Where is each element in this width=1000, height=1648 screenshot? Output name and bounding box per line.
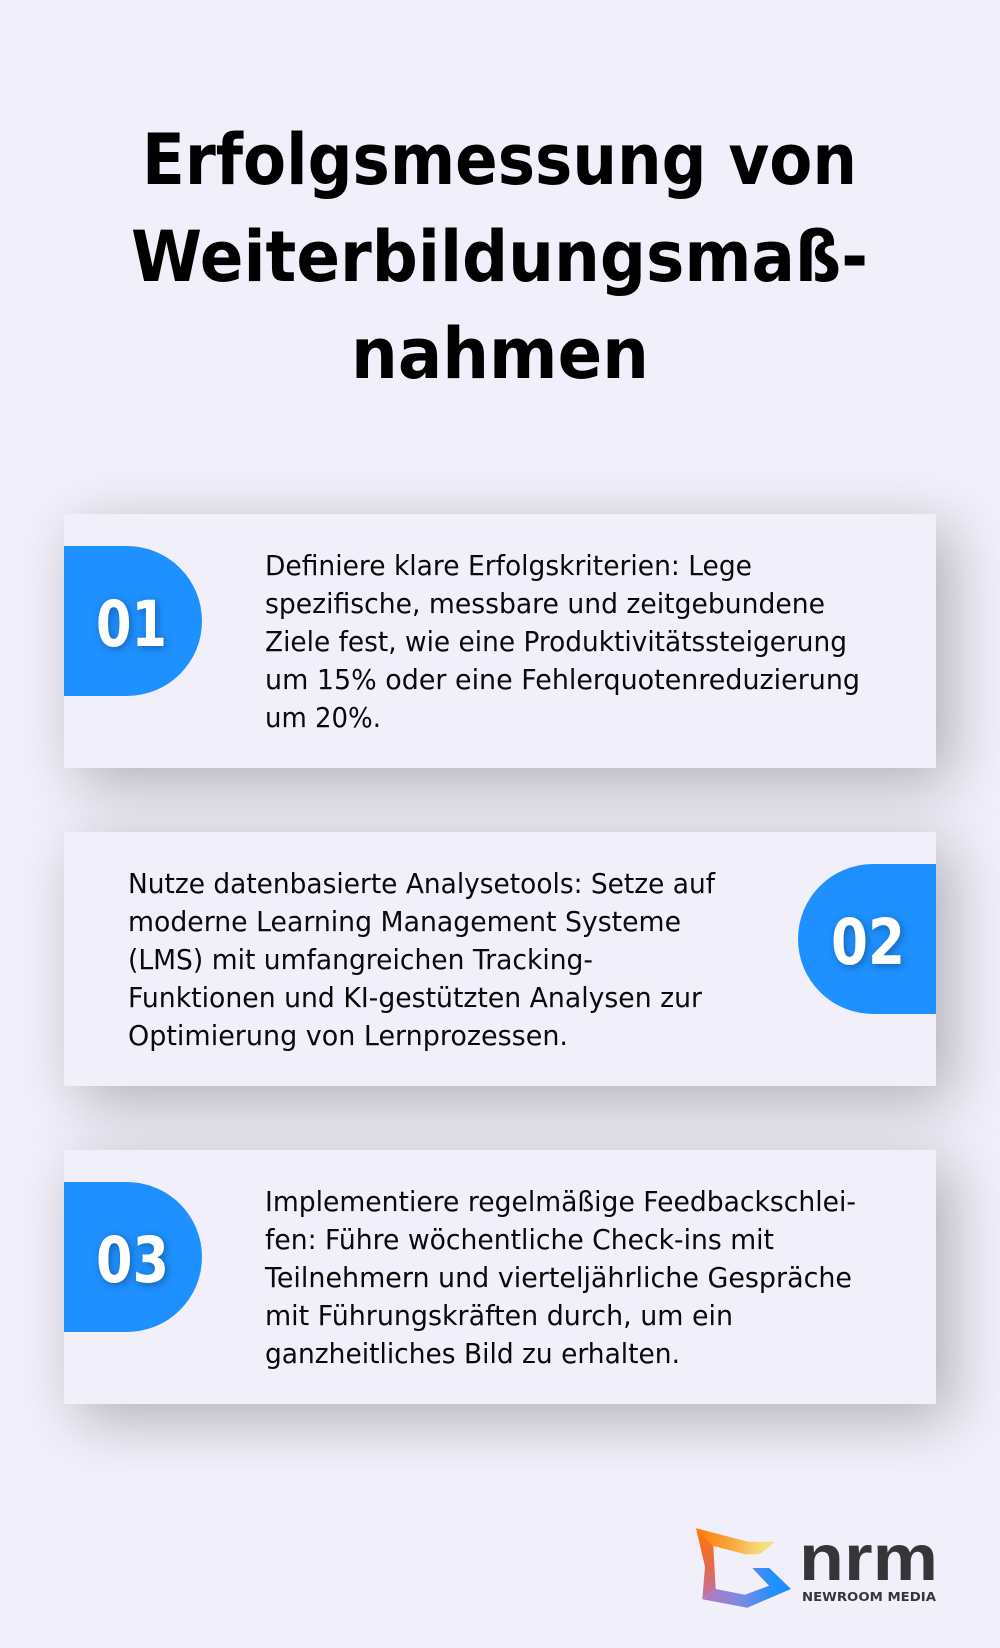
text block 02: Funktionen und KI-gestützten Analysen zur bbox=[128, 982, 703, 1014]
text block 01 bbox=[265, 550, 860, 734]
text block 03 bbox=[264, 1186, 856, 1370]
text block 01: um 15% oder eine Fehlerquotenreduzierung bbox=[265, 664, 860, 696]
logo tagline: NEWROOM MEDIA bbox=[802, 1589, 936, 1604]
card background 02 bbox=[64, 832, 936, 1086]
text block 03: fen: Führe wöchentliche Check-ins mit bbox=[265, 1224, 774, 1256]
text block 02 bbox=[128, 868, 716, 1052]
logo wordmark: nrm bbox=[799, 1521, 938, 1594]
panel: step 02 bbox=[64, 832, 936, 1086]
text block 03: ganzheitliches Bild zu erhalten. bbox=[265, 1338, 680, 1370]
text block 03: Teilnehmern und vierteljährliche Gespräche bbox=[264, 1262, 852, 1294]
logo: Newroom Media bbox=[696, 1521, 938, 1608]
card background 03 bbox=[64, 1150, 936, 1404]
title bbox=[131, 119, 868, 395]
text block 01: spezifische, messbare und zeitgebundene bbox=[265, 588, 825, 620]
text block 02: Nutze datenbasierte Analysetools: Setze auf bbox=[128, 868, 716, 900]
text block 02: (LMS) mit umfangreichen Tracking- bbox=[128, 944, 593, 976]
text block 01: Ziele fest, wie eine Produktivitätssteigerung bbox=[265, 626, 847, 658]
text block 02: Optimierung von Lernprozessen. bbox=[128, 1020, 568, 1052]
text block 02: moderne Learning Management Systeme bbox=[128, 906, 681, 938]
number badge 03 bbox=[64, 1182, 202, 1332]
text block 03: Implementiere regelmäßige Feedbackschlei- bbox=[265, 1186, 856, 1218]
card background 01 bbox=[64, 514, 936, 768]
number badge 01 bbox=[64, 546, 202, 696]
text block 01: um 20%. bbox=[265, 702, 381, 734]
text block 01: Definiere klare Erfolgskriterien: Lege bbox=[265, 550, 752, 582]
title: nahmen bbox=[351, 313, 649, 395]
title: Weiterbildungsmaß- bbox=[131, 216, 868, 298]
number badge 02 bbox=[798, 864, 936, 1014]
number badge 02: 02 bbox=[831, 906, 905, 979]
number badge 03: 03 bbox=[96, 1224, 169, 1297]
panel: step 01 bbox=[64, 514, 936, 768]
text block 03: mit Führungskräften durch, um ein bbox=[265, 1300, 733, 1332]
number badge 01: 01 bbox=[96, 588, 167, 661]
panel: step 03 bbox=[64, 1150, 936, 1404]
title: Erfolgsmessung von bbox=[142, 119, 857, 201]
icon: logo mark bbox=[696, 1528, 791, 1608]
